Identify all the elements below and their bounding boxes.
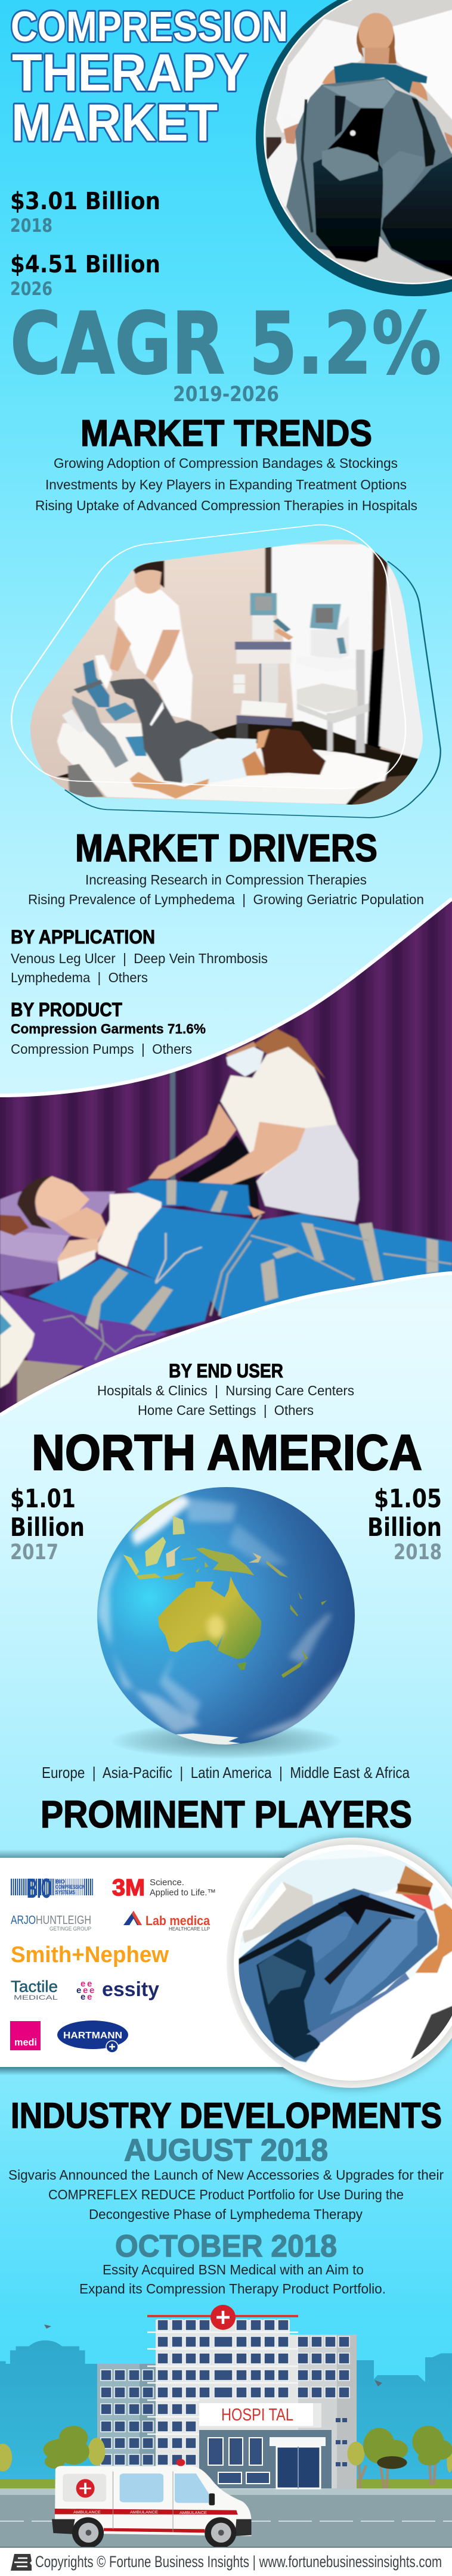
ambulance: AMBULANCE [179,2511,208,2515]
logo: Lab medica [123,1911,210,1932]
logo: ArjoHuntleigh: ARJO [11,1914,36,1927]
market trends list: Rising Uptake of Advanced Compression Therapies in Hospitals [35,498,417,513]
north america value 2017 [10,1484,85,1565]
market size 2018: $3.01 Billion [10,188,160,215]
logo: Tactile Medical: MEDICAL [14,1994,58,2001]
title line: compression: COMPRESSION [11,4,288,51]
north america value 2017: $1.01 [10,1484,76,1514]
development: august 2018: Decongestive Phase of Lymphedema Therapy [89,2206,363,2222]
logo: Essity: e [76,1985,81,1995]
market size 2018 [10,188,160,237]
CAGR headline: 2019-2026 [173,383,279,406]
logo: Essity: e [87,1979,92,1989]
birds [44,2324,382,2386]
segment: by end user: Hospitals & Clinics | Nursing Care Centers [97,1383,354,1398]
road [0,2495,452,2547]
title line: market: MARKET [11,93,218,152]
market trends list: Investments by Key Players in Expanding Treatment Options [45,477,407,492]
north america value 2017: Billion [10,1513,85,1543]
market size 2018: 2018 [10,215,52,237]
north america value 2017: 2017 [10,1540,58,1565]
segment: by end user [97,1360,354,1418]
title line: therapy: THERAPY [12,43,248,102]
logo: Hartmann [57,2021,128,2053]
hospital sign: HOSPI TAL [221,2406,293,2425]
development: august 2018: AUGUST 2018 [124,2133,328,2168]
segment: by application: Venous Leg Ulcer | Deep Vein Thrombosis [11,951,268,966]
segment: by application: BY APPLICATION [11,926,155,948]
trees [0,2426,452,2488]
segment: by product [11,999,206,1057]
footer [0,2547,452,2576]
market size 2026: 2026 [10,278,52,300]
market drivers list: Increasing Research in Compression Therapies [85,872,367,887]
hospital building [97,2305,357,2489]
windows [101,2320,349,2465]
market drivers list [28,872,424,907]
ambulance [52,2459,252,2548]
market trends list: Growing Adoption of Compression Bandages & Stockings [54,455,398,471]
ambulance: AMBULANCE [73,2510,101,2515]
logo: medi: medi [14,2037,37,2048]
logo: Hartmann: HARTMANN [63,2031,122,2041]
entrance block [199,2430,332,2488]
logo: 3M [112,1875,216,1901]
logo: Lab medica: HEALTHCARE LLP [169,1926,210,1932]
city skyline [0,2341,452,2479]
market trends list [35,455,417,513]
logo: Essity: essity [102,1978,159,2001]
logo: 3M: Science. [150,1878,184,1888]
north america value 2018 [367,1484,442,1565]
logo: ArjoHuntleigh: HUNTLEIGH [36,1914,91,1927]
north america heading: NORTH AMERICA [32,1424,422,1481]
logo: ArjoHuntleigh: GETINGE GROUP [49,1926,91,1932]
logo: Lab medica: Lab medica [145,1913,210,1928]
segment: by application: Lymphedema | Others [11,970,148,985]
logo: Smith+Nephew: Smith+Nephew [11,1942,169,1967]
logo: 3M: Applied to Life.™ [150,1888,216,1898]
illustration: hospital scene [0,2305,452,2548]
pavement [0,2488,452,2496]
development: august 2018: COMPREFLEX REDUCE Product Portfolio for Use During the [48,2187,404,2202]
logo: ArjoHuntleigh [11,1914,91,1932]
title [11,4,288,152]
market size 2026: $4.51 Billion [10,251,160,278]
logo: Bio Compression Systems: SYSTEMS [55,1889,75,1895]
development: october 2018 [79,2229,386,2296]
logo: Essity: e [81,1979,85,1989]
logo: Bio Compression Systems: BIO [27,1873,52,1904]
green verge [0,2479,452,2489]
logo: Essity: e [81,1992,85,2002]
market drivers list: Rising Prevalence of Lymphedema | Growing Geriatric Population [28,892,424,907]
segment: by end user: BY END USER [169,1360,283,1382]
photo: woman in compression boots [255,0,452,302]
segment: by product: BY PRODUCT [11,999,122,1020]
logo: Essity: e [89,1985,94,1995]
photo: patient in blue compression suit [0,894,452,1422]
ambulance: AMBULANCE [130,2510,159,2515]
logo: Bio Compression Systems [11,1873,93,1904]
development: august 2018 [8,2133,444,2222]
segment: by product: Compression Pumps | Others [11,1041,192,1057]
logo: Essity [76,1978,159,2002]
logo: Bio Compression Systems: COMPRESSION [55,1884,85,1890]
market size 2026 [10,251,160,300]
icon: Fortune Business Insights logo [11,2554,32,2571]
development: august 2018: Sigvaris Announced the Launch of New Accessories & Upgrades for their [8,2167,444,2183]
market drivers heading: MARKET DRIVERS [75,826,377,870]
photo: therapist with patient on bed [11,525,441,818]
logo: medi [10,2021,41,2050]
development: october 2018: Essity Acquired BSN Medical with an Aim to [103,2262,364,2277]
segment: by application [11,926,268,985]
market trends heading: MARKET TRENDS [81,413,372,454]
logo: Essity: e [83,1985,88,1995]
logo: Bio Compression Systems: BIO [55,1879,65,1885]
segment: by product: Compression Garments 71.6% [11,1021,206,1036]
development: october 2018: OCTOBER 2018 [115,2229,337,2264]
logo: Essity: e [87,1992,92,2002]
logo: 3M: 3M [112,1875,145,1901]
photo: blue compression boots [239,1849,452,2066]
prominent players heading: PROMINENT PLAYERS [41,1793,412,1836]
logo: Tactile Medical: Tactile [11,1978,58,1995]
icon: globe [97,1486,355,1759]
hospital sign [199,2403,321,2428]
panel: prominent players [0,1835,452,2090]
icon: red cross badge [210,2305,236,2330]
segment: by end user: Home Care Settings | Others [138,1402,314,1418]
development: october 2018: Expand its Compression Therapy Product Portfolio. [79,2281,386,2296]
north america value 2018: 2018 [394,1540,442,1565]
